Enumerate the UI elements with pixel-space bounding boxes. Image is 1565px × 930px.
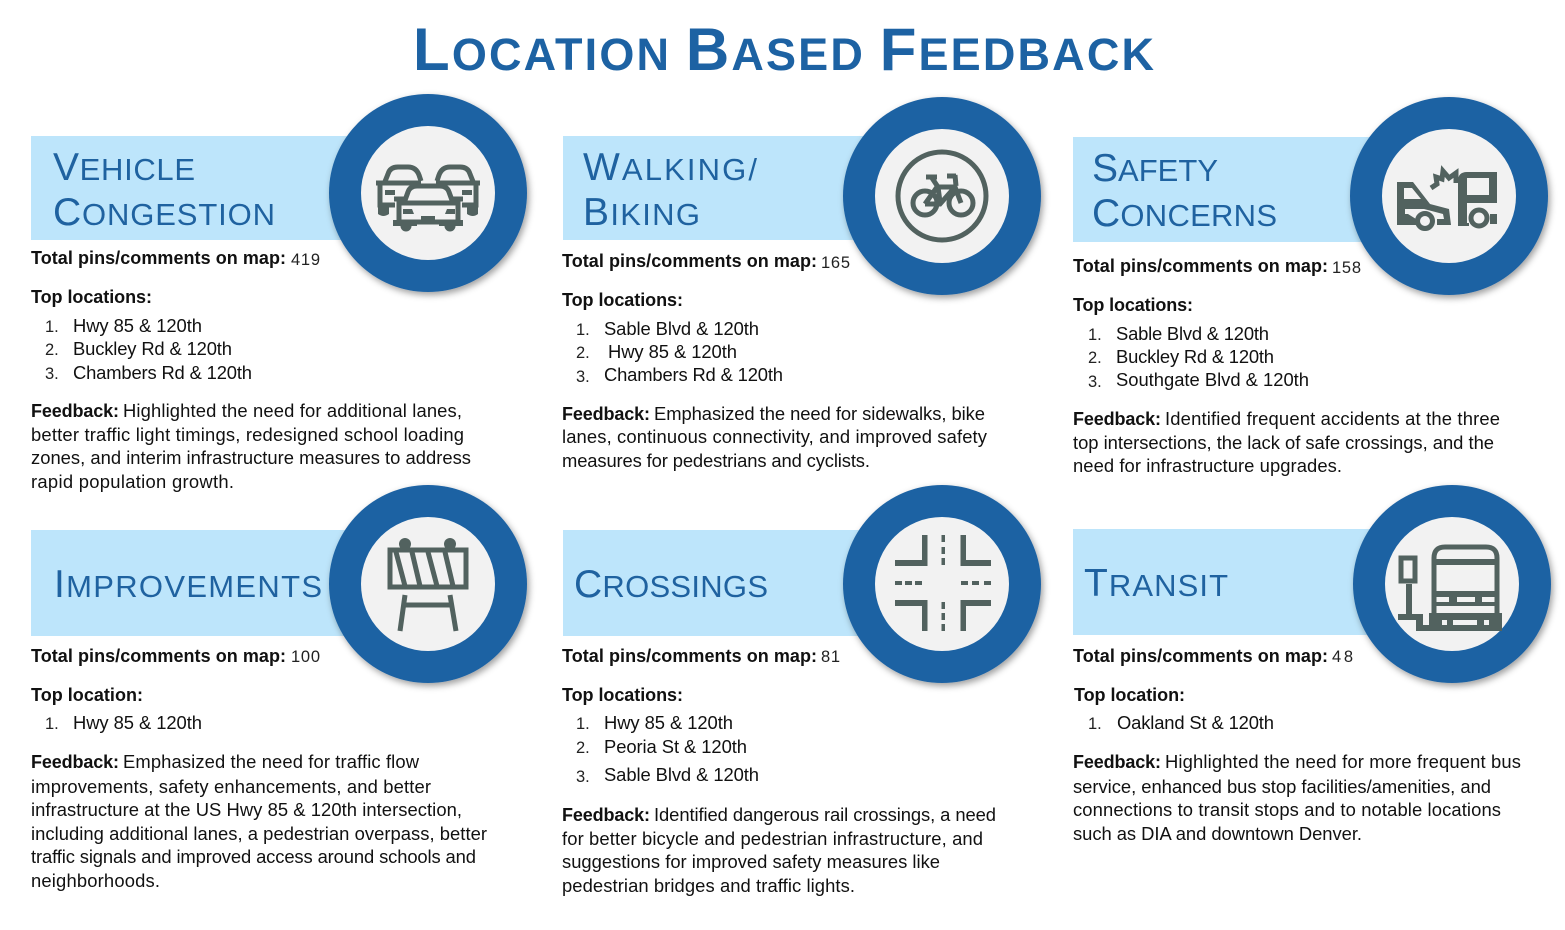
- top locations: 2.: [45, 341, 59, 359]
- top location: Oakland St & 120th: [1117, 712, 1274, 733]
- heading: [1092, 147, 1277, 235]
- feedback: connections to transit stops and to notable locations: [1073, 799, 1501, 820]
- feedback: Highlighted the need for more frequent bus: [1165, 751, 1521, 772]
- stats: 419: [291, 251, 320, 269]
- top locations: Chambers Rd & 120th: [604, 364, 783, 385]
- icon: crash: [1397, 171, 1497, 228]
- heading: CROSSINGS: [574, 563, 768, 606]
- top locations: Sable Blvd & 120th: [604, 318, 759, 339]
- heading: CONGESTION: [53, 191, 275, 234]
- header band: [31, 530, 351, 636]
- panel: transit: [1073, 485, 1551, 844]
- stats: Total pins/comments on map:: [1073, 646, 1328, 666]
- feedback: [31, 400, 471, 492]
- feedback: Feedback:: [562, 805, 650, 825]
- icon: bicycle: [898, 152, 986, 240]
- top locations: [562, 685, 759, 786]
- feedback: rapid population growth.: [31, 471, 234, 492]
- feedback: infrastructure at the US Hwy 85 & 120th intersection,: [31, 799, 462, 820]
- header band: [563, 136, 873, 240]
- stats: Total pins/comments on map:: [1073, 256, 1328, 276]
- top locations: Buckley Rd & 120th: [73, 338, 232, 359]
- feedback: lanes, continuous connectivity, and improved safety: [562, 426, 988, 447]
- feedback: Emphasized the need for sidewalks, bike: [654, 403, 985, 424]
- stats: 165: [821, 254, 850, 272]
- feedback: service, enhanced bus stop facilities/amenities, and: [1073, 776, 1491, 797]
- feedback: neighborhoods.: [31, 870, 160, 891]
- feedback: [31, 751, 487, 891]
- top locations: Hwy 85 & 120th: [608, 341, 737, 362]
- feedback: Feedback:: [31, 401, 119, 421]
- feedback: Feedback:: [31, 752, 119, 772]
- feedback: including additional lanes, a pedestrian overpass, better: [31, 823, 487, 844]
- heading: VEHICLE: [53, 146, 195, 189]
- feedback: Feedback:: [562, 404, 650, 424]
- feedback: Identified frequent accidents at the three: [1165, 408, 1500, 429]
- top locations: Top locations:: [562, 290, 683, 310]
- feedback: better traffic light timings, redesigned school loading: [31, 424, 464, 445]
- top location: Hwy 85 & 120th: [73, 712, 202, 733]
- top locations: Peoria St & 120th: [604, 736, 747, 757]
- top locations: 1.: [576, 715, 590, 733]
- top location: 1.: [45, 715, 59, 733]
- feedback: pedestrian bridges and traffic lights.: [562, 875, 855, 896]
- header band: [1073, 529, 1383, 635]
- circle badge: [1353, 485, 1551, 683]
- feedback: traffic signals and improved access around schools and: [31, 846, 476, 867]
- heading: TRANSIT: [1084, 562, 1228, 605]
- top locations: [1073, 295, 1309, 391]
- panel: crossings: [562, 485, 1041, 896]
- stats: 100: [291, 648, 320, 666]
- icon: intersection: [895, 535, 991, 631]
- top location: [1074, 685, 1274, 733]
- top location: Top location:: [31, 685, 143, 705]
- top locations: 2.: [576, 344, 590, 362]
- top locations: 3.: [45, 365, 59, 383]
- feedback: [562, 403, 988, 471]
- heading: SAFETY: [1092, 147, 1218, 190]
- top location: 1.: [1088, 715, 1102, 733]
- top locations: 2.: [576, 739, 590, 757]
- top locations: 1.: [1088, 326, 1102, 344]
- circle badge: [329, 485, 527, 683]
- feedback: such as DIA and downtown Denver.: [1073, 823, 1362, 844]
- feedback: [562, 804, 996, 896]
- icon: road barricade: [390, 538, 466, 631]
- stats: 81: [821, 648, 840, 666]
- top locations: 3.: [576, 768, 590, 786]
- panel: safety concerns: [1073, 97, 1548, 476]
- stats: Total pins/comments on map:: [562, 251, 817, 271]
- feedback: Emphasized the need for traffic flow: [123, 751, 420, 772]
- heading: IMPROVEMENTS: [54, 563, 322, 606]
- top locations: Sable Blvd & 120th: [1116, 323, 1269, 344]
- feedback: Highlighted the need for additional lanes,: [123, 400, 462, 421]
- header band: [563, 530, 873, 636]
- feedback: [1073, 408, 1500, 476]
- top locations: Top locations:: [31, 287, 152, 307]
- header band: [31, 136, 351, 240]
- feedback: measures for pedestrians and cyclists.: [562, 450, 870, 471]
- top location: Top location:: [1074, 685, 1185, 705]
- top locations: Hwy 85 & 120th: [73, 315, 202, 336]
- top locations: 3.: [1088, 373, 1102, 391]
- top locations: Sable Blvd & 120th: [604, 764, 759, 785]
- heading: [53, 146, 275, 234]
- icon: cars: [376, 167, 480, 232]
- stats: Total pins/comments on map:: [31, 646, 286, 666]
- title: LOCATION BASED FEEDBACK: [413, 16, 1154, 83]
- circle badge: [843, 97, 1041, 295]
- top locations: Top locations:: [1073, 295, 1193, 315]
- top locations: Chambers Rd & 120th: [73, 362, 252, 383]
- circle badge: [1350, 97, 1548, 295]
- panel: vehicle congestion: [31, 94, 527, 492]
- heading: WALKING/: [583, 146, 757, 189]
- feedback: zones, and interim infrastructure measures to address: [31, 447, 471, 468]
- feedback: for better bicycle and pedestrian infrastructure, and: [562, 828, 983, 849]
- heading: BIKING: [583, 191, 700, 234]
- stats: 48: [1332, 648, 1353, 666]
- top locations: 3.: [576, 368, 590, 386]
- feedback: need for infrastructure upgrades.: [1073, 455, 1342, 476]
- stats: Total pins/comments on map:: [31, 248, 286, 268]
- heading: [583, 146, 757, 234]
- feedback: improvements, safety enhancements, and better: [31, 776, 431, 797]
- top locations: 1.: [576, 321, 590, 339]
- top locations: [31, 287, 252, 383]
- panel: walking/biking: [562, 97, 1041, 471]
- top locations: Southgate Blvd & 120th: [1116, 369, 1309, 390]
- feedback: Identified dangerous rail crossings, a need: [654, 804, 996, 825]
- top locations: 1.: [45, 318, 59, 336]
- top locations: Buckley Rd & 120th: [1116, 346, 1274, 367]
- top locations: 2.: [1088, 349, 1102, 367]
- circle badge: [843, 485, 1041, 683]
- top locations: Hwy 85 & 120th: [604, 712, 733, 733]
- feedback: Feedback:: [1073, 752, 1161, 772]
- top locations: [562, 290, 783, 386]
- feedback: Feedback:: [1073, 409, 1161, 429]
- icon: bus stop: [1398, 547, 1502, 631]
- heading: CONCERNS: [1092, 192, 1277, 235]
- stats: 158: [1332, 259, 1361, 277]
- circle badge: [329, 94, 527, 292]
- header band: [1073, 137, 1383, 242]
- stats: Total pins/comments on map:: [562, 646, 817, 666]
- feedback: [1073, 751, 1521, 844]
- feedback: suggestions for improved safety measures like: [562, 851, 940, 872]
- feedback: top intersections, the lack of safe crossings, and the: [1073, 432, 1494, 453]
- top locations: Top locations:: [562, 685, 683, 705]
- panel: improvements: [31, 485, 527, 891]
- top location: [31, 685, 202, 733]
